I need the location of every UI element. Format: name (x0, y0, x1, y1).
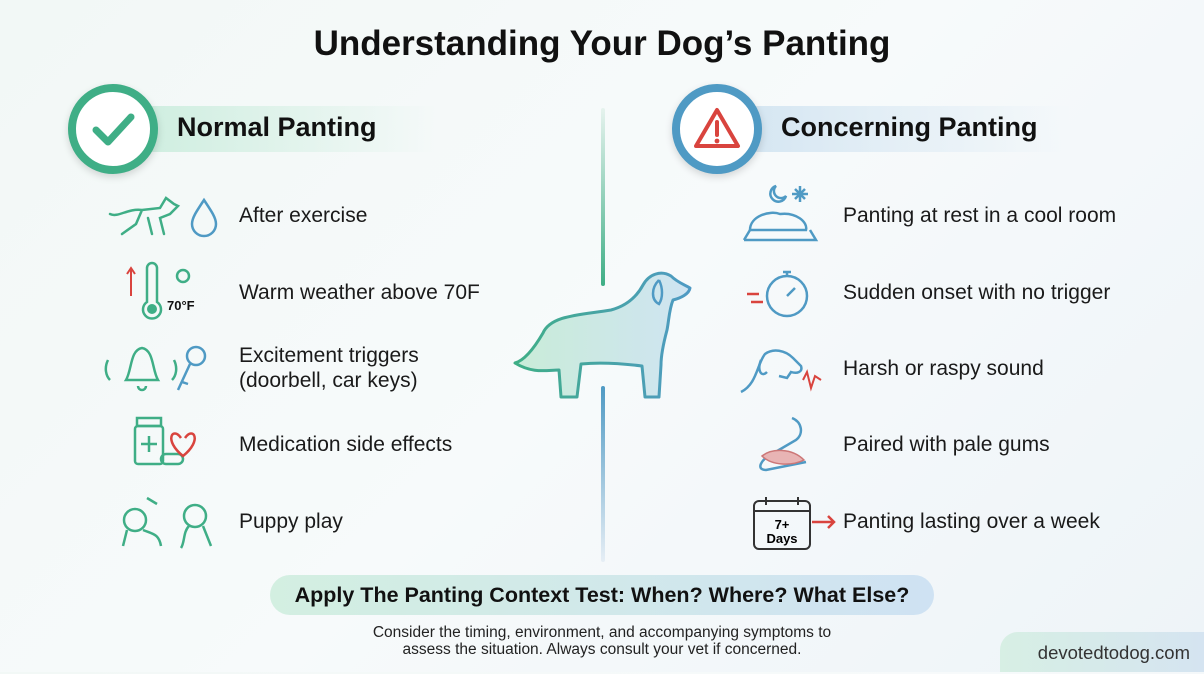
text: pale gums: Paired with pale gums (843, 433, 1050, 456)
text: excitement (239, 344, 419, 392)
watermark: devotedtodog.com (1038, 642, 1190, 663)
icon: central dog (513, 272, 692, 398)
icon: gums (759, 417, 806, 472)
icon: calendar: Days (766, 531, 798, 546)
text: sudden onset: Sudden onset with no trigger (843, 281, 1110, 304)
text: after exercise: After exercise (239, 204, 367, 227)
icon: thermometer: 70°F (167, 298, 195, 313)
watermark (1000, 632, 1204, 672)
text: excitement: (doorbell, car keys) (239, 369, 418, 392)
callout: context test: Apply The Panting Context Test: When? Where? What Else? (295, 583, 909, 607)
icon: stopwatch (747, 270, 808, 318)
divider (601, 108, 605, 286)
text: excitement: Excitement triggers (239, 344, 419, 367)
icon: calendar (753, 497, 836, 550)
text: harsh sound: Harsh or raspy sound (843, 357, 1044, 380)
icon: warning badge (672, 84, 762, 174)
panel header: concerning (670, 84, 1038, 180)
icon: dog barking (740, 349, 822, 394)
text: rest in cool room: Panting at rest in a cool room (843, 204, 1116, 227)
icon: check badge (68, 84, 158, 174)
icon: bell and keys (104, 346, 206, 392)
icon: thermometer (126, 262, 195, 320)
text: medication: Medication side effects (239, 433, 452, 456)
text block: advice: Consider the timing, environment, and accompanying symptoms to (373, 624, 831, 641)
text block: advice (373, 624, 831, 658)
heading: Concerning Panting (781, 112, 1038, 142)
text: warm weather: Warm weather above 70F (239, 281, 480, 304)
icon: calendar: 7+ (775, 517, 790, 532)
callout: context test (270, 575, 934, 615)
panel header: normal (66, 84, 377, 180)
icon: medication (134, 416, 196, 466)
text block: advice: assess the situation. Always consult your vet if concerned. (403, 641, 801, 658)
text: over a week: Panting lasting over a week (843, 510, 1100, 533)
text: puppy play: Puppy play (239, 510, 343, 533)
icon: dog resting (743, 184, 818, 242)
title: Understanding Your Dog’s Panting (314, 24, 890, 63)
icon: puppies (122, 496, 212, 549)
icon: running dog and drop (108, 196, 218, 238)
heading: Normal Panting (177, 112, 377, 142)
